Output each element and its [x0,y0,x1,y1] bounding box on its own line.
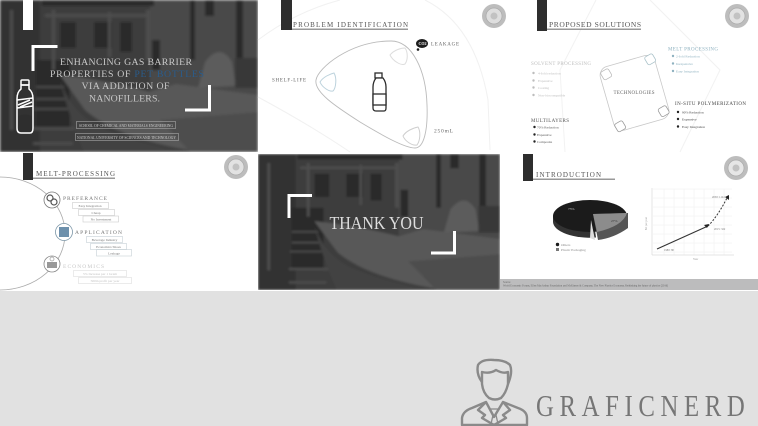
panel: problem identification [258,0,506,152]
list: melt processing: MELT PROCESSING [668,48,718,52]
section: preferance [63,196,118,222]
section: economics: 500m profit per year [91,279,120,283]
heading underline [292,28,408,30]
technologies diagram [598,53,671,132]
heading: INTRODUCTION [536,171,601,179]
list: in-situ polymerization: 90% Reduction [682,110,704,114]
icon: university seal [724,156,748,180]
source footer: Source: [503,281,511,284]
icon: university seal [224,155,248,179]
accent bar [23,0,33,30]
title text: NANOFILLERS. [89,94,160,104]
section: application: Leakage [108,252,120,256]
pie legend: Others [561,243,571,247]
list: melt processing: Inexpensive [676,62,693,66]
line chart: 2015: 322 [714,228,726,231]
background curves [560,0,720,152]
header bar [537,0,547,31]
label: 250mL: 250mL [434,128,454,134]
source footer [500,279,758,290]
panel: title slide [0,0,258,152]
triangle diagram [316,41,427,148]
label: shelf-life: SHELF-LIFE [272,78,306,84]
list: solvent processing: Non-biocompatible [538,94,566,98]
node: top [390,48,407,64]
list: melt processing: 2-fold Reduction [676,54,700,58]
arc [0,177,65,290]
list: multilayers [531,119,569,144]
pie chart: 73% [568,207,574,211]
section: application: Economics Shoes [96,245,122,249]
line chart: 1980: 80 [664,249,674,252]
background curves [258,0,490,152]
panel: introduction [500,154,758,290]
section: economics: 5% Increase per 1 Gram [83,272,117,276]
section: preferance: Easy Integration [78,204,102,208]
section: application: Beverage Industry [92,238,118,242]
title text: VIA ADDITION OF [82,81,170,92]
pie legend: Plastic Packaging [561,248,586,252]
thank you text: THANK YOU [330,213,424,233]
list: in-situ polymerization: Easy Integration [682,125,705,129]
list: solvent processing: SOLVENT PROCESSING [531,62,591,67]
section: application [75,230,132,256]
title text: ENHANCING GAS BARRIER [60,57,192,68]
icon: person in suit [462,360,527,425]
icon: CO2 cloud: CO2 [418,41,426,46]
panel: melt-processing [0,153,248,290]
university label: NATIONAL UNIVERSITY OF SCIENCES AND TECHNOLOGY [77,135,177,140]
bottom-right bracket [431,231,454,253]
panel: thank you [258,154,500,290]
list: multilayers: 70% Reduction [537,126,559,130]
heading: PROPOSED SOLUTIONS [549,20,641,29]
section: preferance: No Investment [91,218,111,222]
icon: bottle [373,73,386,111]
pie chart: 27% [611,219,618,223]
top-left bracket [33,46,58,71]
header bar [281,0,292,30]
node: bottom [403,127,420,145]
list: solvent processing [531,62,591,98]
section: economics [63,264,132,284]
list: in-situ polymerization: Expensive [682,118,697,122]
icon: application [56,224,72,240]
list: multilayers: Composite [537,140,553,144]
list: in-situ polymerization [675,102,746,129]
pie chart [553,200,628,240]
list: solvent processing: Coating [538,86,549,90]
technologies diagram: TECHNOLOGIES [614,91,655,96]
section: preferance: PREFERANCE [63,196,108,202]
icon: gears [44,192,60,208]
university label [76,134,178,140]
top-left bracket [289,196,312,218]
list: melt processing [668,48,718,74]
icon: university seal [725,4,749,28]
line chart: Mt per year [645,217,648,230]
list: melt processing: Easy Integration [676,70,699,74]
school label: SCHOOL OF CHEMICAL AND MATERIALS ENGINEERING [79,123,174,128]
list: solvent processing: Expensive [538,79,553,83]
heading underline [533,178,615,180]
pie legend [556,243,586,252]
list: in-situ polymerization: IN-SITU POLYMERIZATION [675,102,746,107]
bottom-right bracket [185,85,210,110]
icon: CO2 cloud [416,39,428,51]
header bar [23,153,33,180]
heading underline [547,28,641,30]
title text [50,57,204,104]
source footer: World Economic Forum, Ellen MacArthur Foundation and McKinsey & Company, The New Plastics Economy, Rethinking the future of plastics (2016) [503,284,668,288]
panel: proposed solutions [531,0,749,152]
node: shelf-life [320,73,336,91]
heading: MELT-PROCESSING [36,170,115,178]
icon: soda bottle [17,80,33,133]
section: application: APPLICATION [75,230,122,236]
icon: university seal [482,4,506,28]
school label [76,122,176,128]
heading: PROBLEM IDENTIFICATION [293,21,408,29]
icon: economics [44,256,60,272]
bottom grey band [0,291,758,426]
line chart: 2050: 1124 [712,196,725,199]
background photo [258,154,500,290]
heading underline [33,178,115,179]
brand: graficnerd [462,360,745,425]
line chart [645,188,734,261]
label: leakage: LEAKAGE [431,42,459,48]
section: preferance: Cheap [92,211,101,215]
list: solvent processing: 4-fold reduction [538,72,561,76]
list: multilayers: Expensive [537,133,552,137]
list: multilayers: MULTILAYERS [531,119,569,124]
background photo [0,0,258,152]
title text: PROPERTIES OF PET BOTTLES [50,69,204,80]
section: economics: ECONOMICS [63,264,104,270]
line chart: Year [693,258,698,261]
header bar [523,154,533,181]
wordmark: GRAFICNERD [536,389,745,424]
